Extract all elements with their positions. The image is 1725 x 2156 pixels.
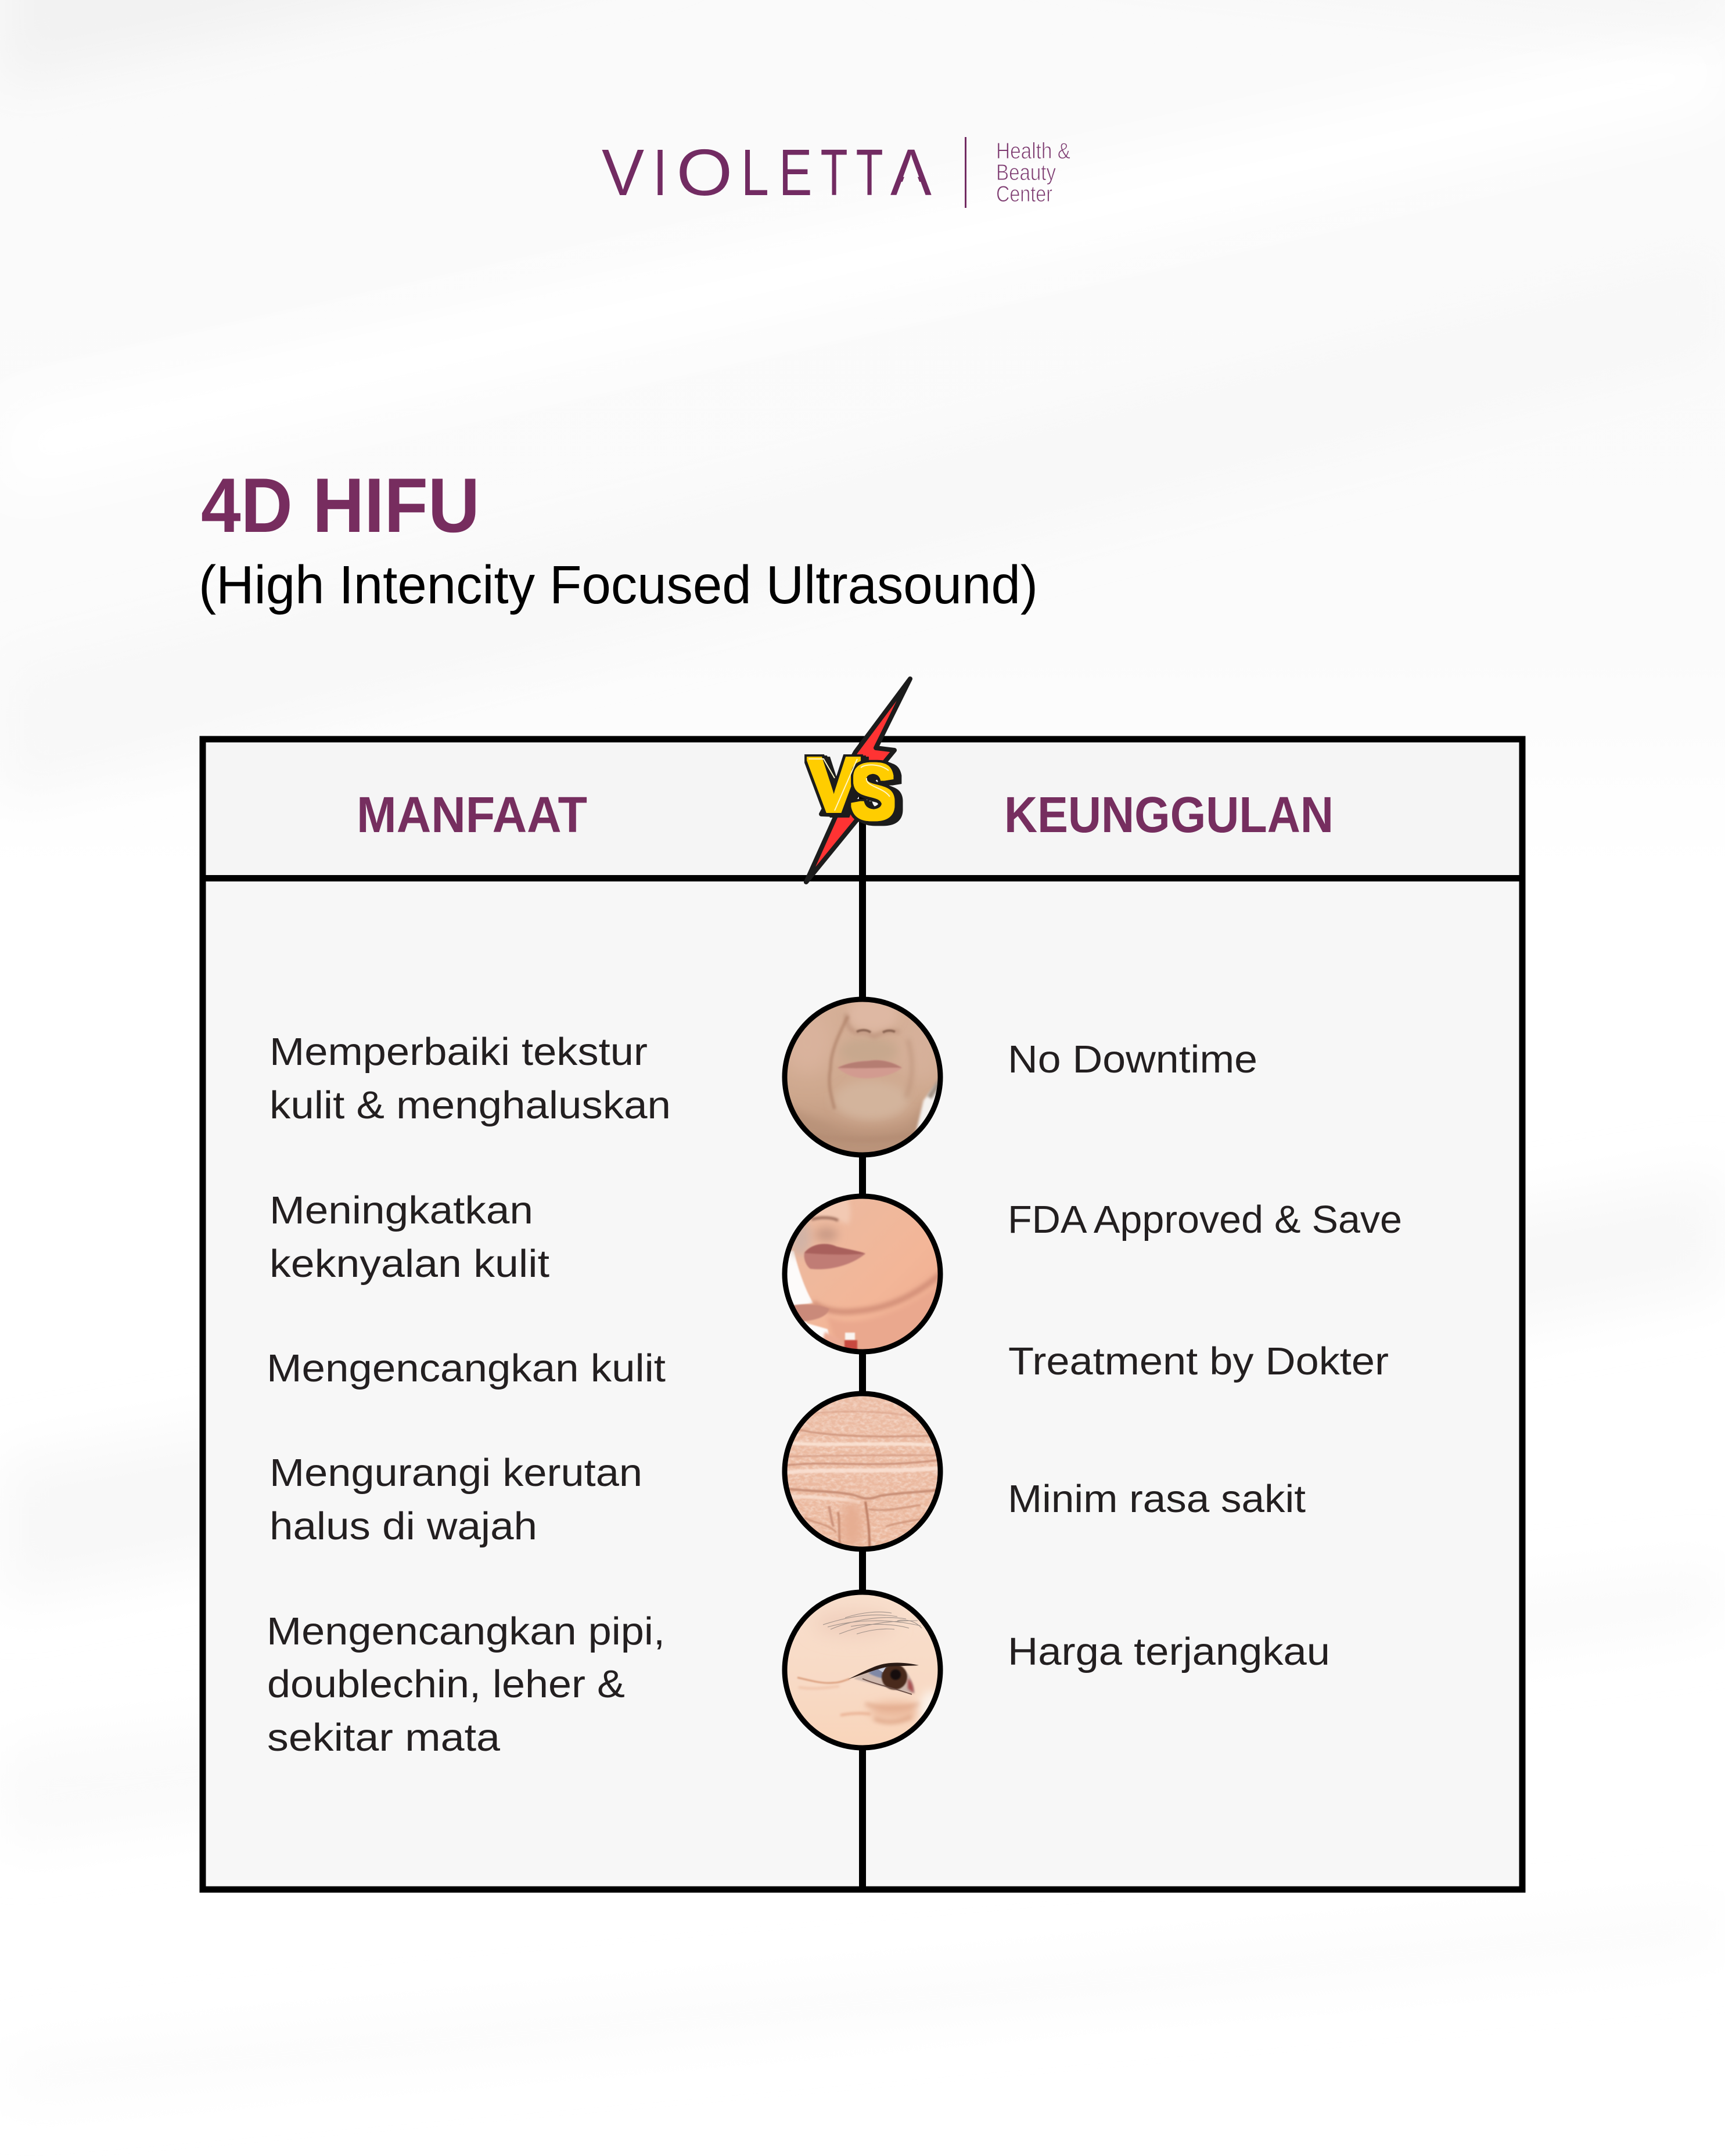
- benefit 2: Meningkatkan: [269, 1189, 533, 1232]
- column heading: Keunggulan: KEUNGGULAN: [1004, 787, 1334, 843]
- logo tagline: [996, 139, 1070, 207]
- VS lettering: V: [808, 742, 860, 827]
- subtitle: (High Intencity Focused Ultrasound): [199, 555, 1038, 615]
- column heading: Manfaat: MANFAAT: [357, 787, 587, 843]
- benefit 4: Mengurangi kerutan: [269, 1451, 642, 1495]
- photo circle: profile with double chin: [781, 1193, 944, 1355]
- VS lettering: S: [851, 748, 896, 836]
- icon: lightning bolt: [806, 679, 910, 882]
- title: 4D HIFU: [201, 463, 480, 549]
- benefit 4: halus di wajah: [269, 1504, 537, 1548]
- advantages list: [1008, 1038, 1402, 1673]
- icon: VS lightning emblem: [806, 679, 910, 882]
- benefit 1: [269, 1030, 671, 1127]
- advantage 2: FDA Approved & Save: [1008, 1198, 1402, 1241]
- photo circle: lower face with smile lines: [781, 996, 944, 1158]
- benefit 5: sekitar mata: [267, 1716, 501, 1759]
- logo tagline: Health &: [996, 139, 1070, 164]
- benefit 5: [267, 1610, 665, 1759]
- logo: Violetta Health & Beauty Center: [602, 135, 1070, 210]
- benefit 1: Memperbaiki tekstur: [269, 1030, 648, 1074]
- VS lettering: [808, 742, 896, 836]
- benefit 5: Mengencangkan pipi,: [267, 1610, 665, 1653]
- logo wordmark: T: [856, 136, 883, 210]
- benefit 3: Mengencangkan kulit: [267, 1347, 666, 1390]
- logo tagline: Beauty: [996, 160, 1056, 185]
- photo circle: eye area: [781, 1589, 944, 1751]
- logo wordmark: I: [653, 135, 667, 209]
- logo wordmark: L: [741, 136, 769, 210]
- logo wordmark: [602, 135, 932, 210]
- benefit 5: doublechin, leher &: [267, 1662, 625, 1706]
- logo wordmark: O: [676, 136, 732, 210]
- logo tagline: Center: [996, 182, 1052, 207]
- benefit 4: [269, 1451, 642, 1548]
- logo wordmark: A: [890, 136, 932, 210]
- logo wordmark: T: [821, 136, 848, 210]
- advantage 1: No Downtime: [1008, 1038, 1257, 1081]
- benefit 2: [269, 1189, 549, 1286]
- photo circle: forehead wrinkles: [781, 1390, 944, 1553]
- logo wordmark: V: [602, 135, 644, 209]
- benefits list: [267, 1030, 671, 1759]
- benefit 1: kulit & menghaluskan: [269, 1084, 671, 1127]
- advantage 4: Minim rasa sakit: [1008, 1477, 1306, 1521]
- logo wordmark: E: [779, 136, 812, 210]
- advantage 3: Treatment by Dokter: [1008, 1340, 1389, 1383]
- benefit 2: keknyalan kulit: [269, 1242, 549, 1286]
- comparison table: [200, 739, 1525, 1889]
- advantage 5: Harga terjangkau: [1008, 1630, 1330, 1673]
